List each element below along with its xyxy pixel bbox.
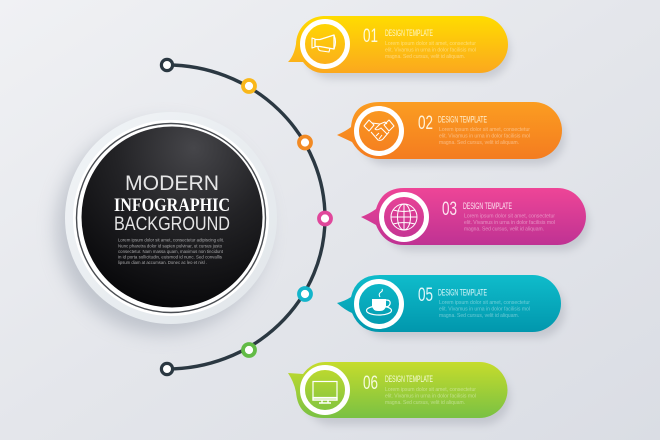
body text 06: elit. Vivamus in urna in dolor facilisis mol <box>385 394 476 400</box>
number 05: 05 <box>418 285 433 306</box>
panel: 01 <box>288 16 510 79</box>
body text 05 <box>439 300 530 319</box>
panel: 06 <box>288 362 510 425</box>
body text 01: magna. Sed cursus, velit id aliquam. <box>385 54 465 60</box>
central body text: lipsum diam at accumsan. Donec ac leo et nisl . <box>118 260 207 266</box>
body text 01: Lorem ipsum dolor sit amet, consectetur <box>385 41 476 47</box>
body text 03: elit. Vivamus in urna in dolor facilisis mol <box>464 220 555 226</box>
node: 01 <box>243 80 255 92</box>
number 03: 03 <box>442 199 457 220</box>
number 02: 02 <box>418 113 433 134</box>
body text 02: Lorem ipsum dolor sit amet, consectetur <box>439 127 530 133</box>
central title: MODERN <box>125 172 219 195</box>
badge: 06 <box>302 368 348 412</box>
body text 05: elit. Vivamus in urna in dolor facilisis mol <box>439 306 530 312</box>
central body text: Lorem ipsum dolor sit amet, consectetur adipiscing elit. <box>118 238 224 244</box>
icon: coffee cup <box>366 289 392 315</box>
node: 06 <box>243 344 255 356</box>
heading 01: DESIGN TEMPLATE <box>385 28 433 38</box>
central body text: in id porta sollicitudin, euismod id nunc. Sed convallis <box>118 254 223 260</box>
central title: BACKGROUND <box>114 214 230 235</box>
body text 06: Lorem ipsum dolor sit amet, consectetur <box>385 387 476 393</box>
body text 03: magna. Sed cursus, velit id aliquam. <box>464 226 544 232</box>
timeline arc <box>161 59 331 375</box>
body text 05: Lorem ipsum dolor sit amet, consectetur <box>439 300 530 306</box>
node: end <box>161 363 173 375</box>
icon: monitor <box>313 382 337 403</box>
central body text: consectetur. Nam massa quam, maximus non tincidunt <box>118 249 224 255</box>
body text 01 <box>385 41 476 60</box>
central body text: Nunc pharetra dolor id sapien pulvinar, ut cursus justo <box>118 244 222 250</box>
body text 01: elit. Vivamus in urna in dolor facilisis mol <box>385 48 476 54</box>
node: 05 <box>299 288 311 300</box>
panel: 05 <box>337 275 565 338</box>
number 01: 01 <box>363 26 378 47</box>
node: start <box>161 59 173 71</box>
panel: 03 <box>361 188 589 251</box>
panel: 02 <box>337 102 565 165</box>
central body text <box>118 238 224 266</box>
badge: 03 <box>382 194 426 240</box>
body text 06 <box>385 387 476 406</box>
body text 05: magna. Sed cursus, velit id aliquam. <box>439 313 519 319</box>
node: 03 <box>319 212 331 224</box>
heading 02: DESIGN TEMPLATE <box>438 114 487 124</box>
body text 03: Lorem ipsum dolor sit amet, consectetur <box>464 214 555 220</box>
icon: handshake <box>364 120 394 140</box>
node: 02 <box>299 136 311 148</box>
heading 03: DESIGN TEMPLATE <box>463 201 512 211</box>
icon: globe <box>391 204 417 230</box>
central title: INFOGRAPHIC <box>114 195 230 216</box>
badge: 01 <box>302 22 348 66</box>
badge: 02 <box>356 108 402 154</box>
heading 06: DESIGN TEMPLATE <box>385 374 433 384</box>
badge: 05 <box>356 282 402 326</box>
central circle <box>56 112 277 334</box>
central title <box>114 172 230 235</box>
icon: megaphone <box>312 35 336 52</box>
body text 06: magna. Sed cursus, velit id aliquam. <box>385 400 465 406</box>
heading 05: DESIGN TEMPLATE <box>438 288 487 298</box>
body text 03 <box>464 214 555 232</box>
body text 02: elit. Vivamus in urna in dolor facilisis mol <box>439 134 530 140</box>
body text 02: magna. Sed cursus, velit id aliquam. <box>439 140 519 146</box>
number 06: 06 <box>363 373 378 394</box>
body text 02 <box>439 127 530 146</box>
